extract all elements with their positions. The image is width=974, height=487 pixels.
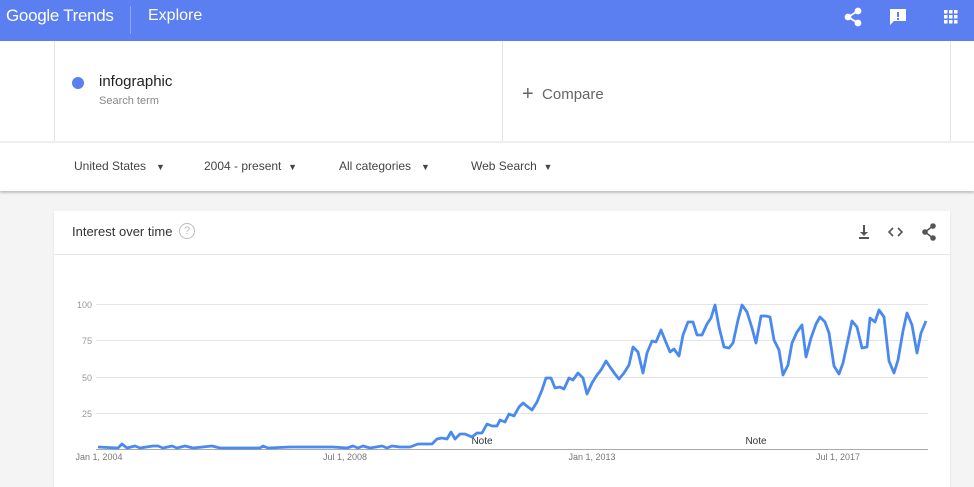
filter bar: Web Search ▼	[471, 159, 552, 173]
icon: help: ?	[184, 225, 190, 237]
icon: help	[179, 223, 195, 239]
search term: infographic: infographic	[99, 73, 172, 90]
search terms area	[0, 41, 974, 141]
filter bar: United States ▼	[74, 159, 165, 173]
filter bar: 2004 - present ▼	[204, 159, 297, 173]
filter bar	[0, 141, 974, 191]
line chart: Jul 1, 2017	[816, 452, 860, 462]
line chart: Note	[471, 436, 493, 447]
panel heading: Interest over time	[72, 224, 172, 239]
icon: apps grid	[944, 10, 958, 24]
line chart: 100	[77, 300, 92, 310]
line chart: Jul 1, 2008	[323, 452, 367, 462]
line chart: 50	[82, 373, 92, 383]
compare button: + Compare	[522, 83, 604, 105]
line chart: Note	[745, 436, 767, 447]
icon: feedback	[890, 9, 906, 25]
line chart: Jan 1, 2013	[568, 452, 616, 462]
search term: infographic	[72, 73, 172, 107]
line chart: Jan 1, 2004	[75, 452, 123, 462]
panel: interest over time	[54, 211, 950, 487]
explore label: Explore	[148, 7, 202, 24]
line chart: 25	[82, 409, 92, 419]
header bar	[0, 0, 974, 41]
search term: infographic: Search term	[99, 95, 159, 107]
logo: Google Trends	[6, 6, 114, 25]
icon: download/embed/share	[859, 223, 936, 241]
filter bar: All categories ▼	[339, 159, 430, 173]
line chart: 75	[82, 336, 92, 346]
icon: share	[844, 8, 862, 26]
